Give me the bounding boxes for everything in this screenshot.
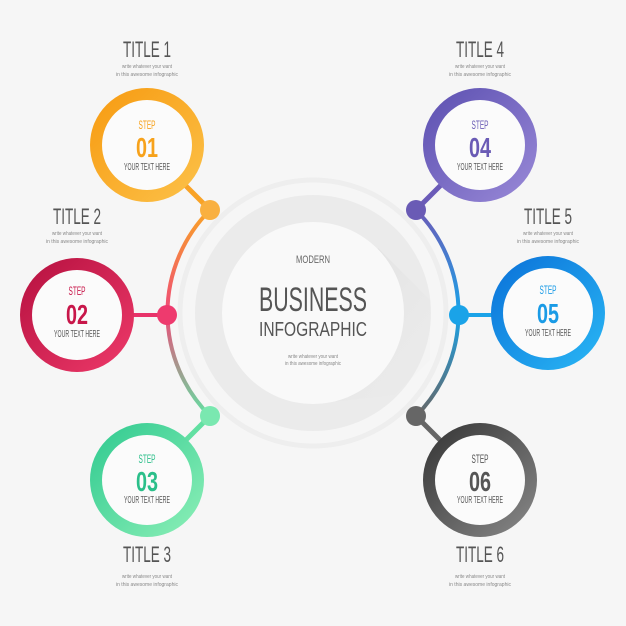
center circle xyxy=(222,222,404,404)
title 5 xyxy=(517,204,579,245)
step 1 xyxy=(90,88,220,220)
step 6: YOUR TEXT HERE xyxy=(457,495,503,506)
step 5: STEP xyxy=(540,283,556,297)
title 1: TITLE 1 xyxy=(123,37,171,62)
title 1 xyxy=(116,37,178,78)
step 2: STEP xyxy=(68,284,86,298)
step 2: YOUR TEXT HERE xyxy=(54,329,100,340)
title 5: in this awesome infographic xyxy=(517,239,579,245)
grey ring xyxy=(195,195,431,431)
step 4: 04 xyxy=(469,132,491,163)
center circle: BUSINESS xyxy=(259,281,367,319)
title 5: TITLE 5 xyxy=(524,204,572,229)
step 6: STEP xyxy=(472,452,488,466)
title 4: TITLE 4 xyxy=(456,37,504,62)
step 2: 02 xyxy=(66,299,88,330)
center circle: MODERN xyxy=(296,254,330,266)
title 1: in this awesome infographic xyxy=(116,72,178,78)
title 6: write whatever your want xyxy=(455,574,506,580)
step 1: YOUR TEXT HERE xyxy=(124,162,170,173)
title 4 xyxy=(449,37,511,78)
title 6: TITLE 6 xyxy=(456,542,504,567)
step 4: STEP xyxy=(472,118,488,132)
title 3: TITLE 3 xyxy=(123,542,171,567)
step 5: 05 xyxy=(537,298,559,329)
title 6: in this awesome infographic xyxy=(449,582,511,588)
step 6 xyxy=(406,406,537,537)
center circle: write whatever your want xyxy=(288,354,339,360)
title 1: write whatever your want xyxy=(122,64,173,70)
step 6: 06 xyxy=(469,466,491,497)
title 2 xyxy=(46,204,108,245)
step 5: YOUR TEXT HERE xyxy=(525,328,571,339)
step 1: 01 xyxy=(136,132,158,163)
center circle: INFOGRAPHIC xyxy=(259,319,367,341)
right arc xyxy=(416,210,459,416)
title 3: in this awesome infographic xyxy=(116,582,178,588)
title 4: in this awesome infographic xyxy=(449,72,511,78)
outer light ring xyxy=(180,180,446,446)
long shadow xyxy=(313,248,430,404)
title 2: in this awesome infographic xyxy=(46,239,108,245)
title 3 xyxy=(116,542,178,588)
step 2 xyxy=(20,258,177,372)
step 4 xyxy=(406,88,537,220)
title 5: write whatever your want xyxy=(523,231,574,237)
title 3: write whatever your want xyxy=(122,574,173,580)
step 1: STEP xyxy=(138,118,156,132)
left arc xyxy=(167,210,210,416)
title 2: TITLE 2 xyxy=(53,204,101,229)
step 5 xyxy=(449,256,605,370)
step 3 xyxy=(90,406,220,537)
step 3: YOUR TEXT HERE xyxy=(124,495,170,506)
title 6 xyxy=(449,542,511,588)
center circle: in this awesome infographic xyxy=(285,361,341,367)
title 2: write whatever your want xyxy=(52,231,103,237)
step 3: 03 xyxy=(136,466,158,497)
step 3: STEP xyxy=(138,452,156,466)
step 4: YOUR TEXT HERE xyxy=(457,162,503,173)
title 4: write whatever your want xyxy=(455,64,506,70)
